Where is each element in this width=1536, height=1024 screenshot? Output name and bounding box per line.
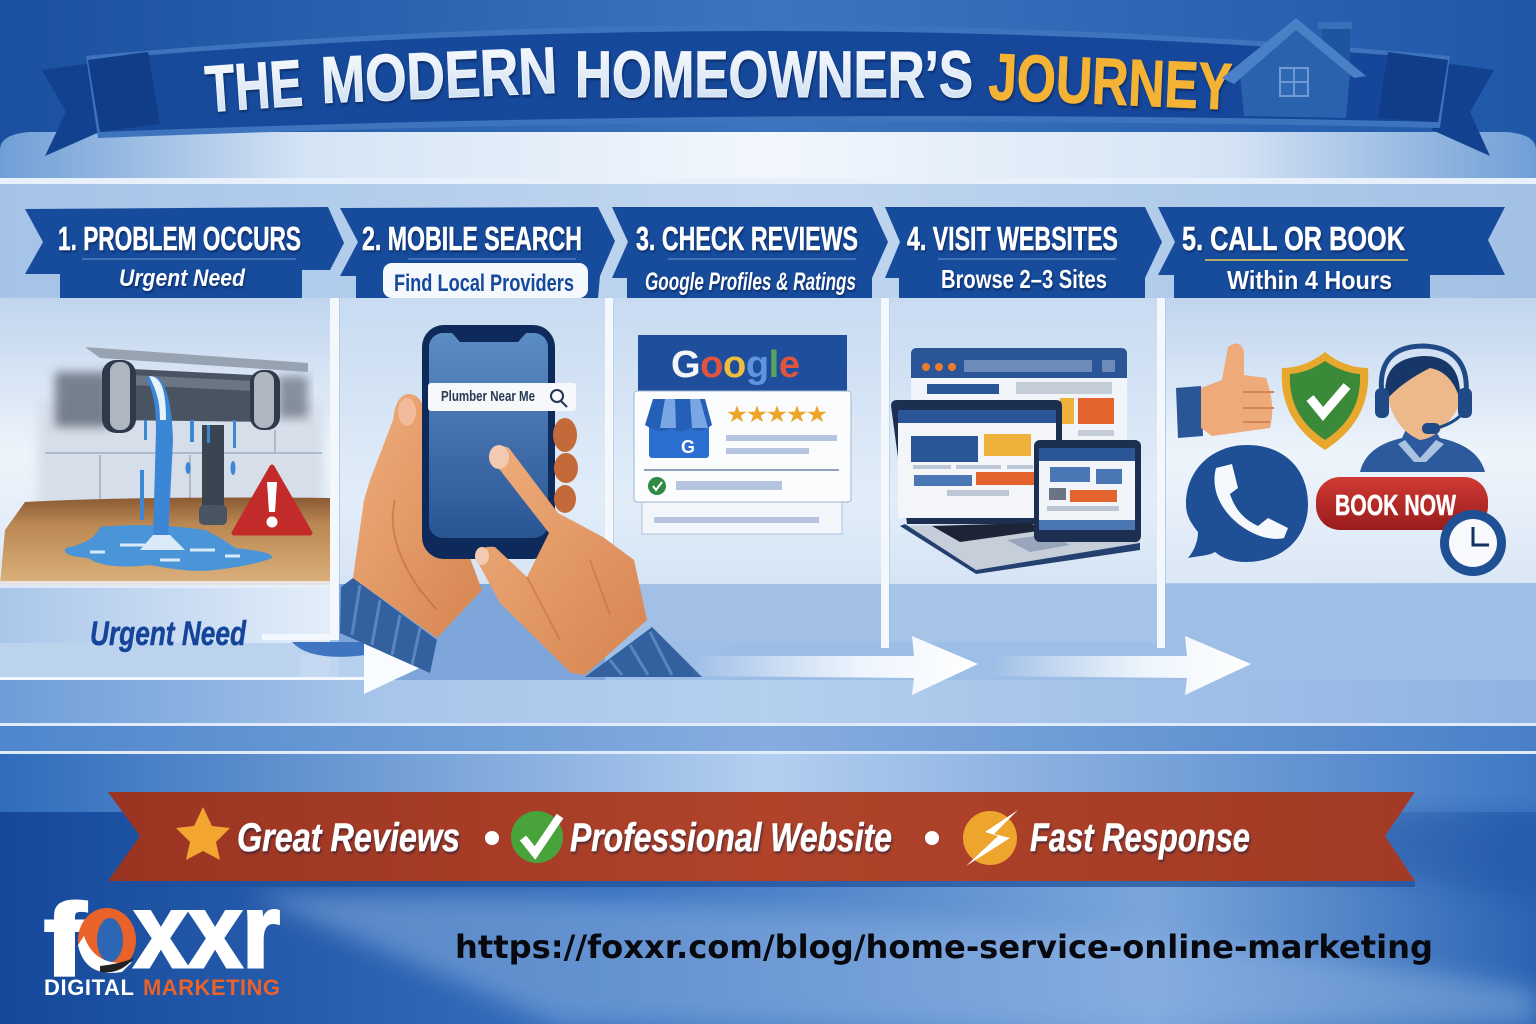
logo tagline: MARKETING [143, 975, 280, 1000]
logo tagline: DIGITAL [44, 975, 134, 1000]
step 4 header: 4. VISIT WEBSITES [907, 220, 1118, 257]
ribbon tails [42, 62, 1494, 156]
step 3 header [612, 207, 888, 298]
title text: HOMEOWNER’S [575, 37, 973, 111]
icon: house [1222, 18, 1366, 118]
icon: support agent [1360, 346, 1485, 472]
icon: lightning [963, 810, 1018, 866]
warning triangle [234, 467, 310, 533]
illustration: call or book icons [1176, 343, 1506, 576]
button: book now [1316, 477, 1488, 530]
right cuff [585, 627, 702, 677]
step 2 header: 2. MOBILE SEARCH [362, 220, 582, 257]
step 4 header [885, 207, 1162, 298]
step 4 header: Browse 2–3 Sites [941, 264, 1107, 294]
illustration: hands holding phone [340, 325, 702, 677]
fingers right side [553, 418, 578, 513]
button: find local providers [383, 263, 588, 298]
title text: THE [203, 45, 305, 126]
button: book now: BOOK NOW [1335, 490, 1456, 522]
arrow 3 [990, 636, 1251, 695]
panels: step columns [0, 298, 1536, 680]
icon: magnifier [551, 390, 567, 407]
wall [38, 372, 323, 510]
bottom ribbon [108, 792, 1415, 887]
google header: G [671, 344, 701, 386]
label: fast response: Fast Response [1030, 816, 1250, 860]
step 1 header [25, 207, 344, 298]
source url: https://foxxr.com/blog/home-service-online-marketing [455, 928, 1433, 966]
back browser [911, 348, 1127, 520]
label: professional website: Professional Website [570, 816, 892, 860]
title text: MODERN [319, 33, 558, 117]
arrow 1 [0, 634, 426, 694]
step 3 header: 3. CHECK REVIEWS [636, 220, 858, 257]
icon: store: G [681, 437, 695, 457]
illustration: websites on devices [891, 348, 1141, 574]
back card [642, 500, 842, 534]
pipe [85, 347, 308, 525]
water drips [140, 420, 236, 520]
icon: shield [1282, 352, 1368, 450]
white edge strip [0, 581, 330, 588]
logo wordmark: xxr [134, 873, 280, 990]
icon: green check [511, 811, 563, 863]
left hand [353, 394, 482, 638]
separator dot [485, 831, 499, 845]
logo: foxxr [44, 873, 280, 1000]
icon: check [648, 477, 666, 495]
step 1 header: Urgent Need [119, 265, 246, 292]
icon: clock [1440, 510, 1506, 576]
logo wordmark [44, 873, 280, 997]
step 1 header: 1. PROBLEM OCCURS [58, 220, 301, 257]
review card [634, 391, 851, 502]
google header: oogle [700, 344, 800, 386]
phone [422, 325, 555, 559]
icon: star [176, 807, 230, 860]
icon: thumbs up [1176, 343, 1274, 438]
rating stars: ★★★★★ [727, 404, 827, 426]
search bar [428, 383, 576, 411]
title text [203, 33, 1233, 126]
icon: store [645, 399, 712, 458]
title text: JOURNEY [987, 39, 1233, 124]
separator dot [925, 831, 939, 845]
urgent need label: Urgent Need [90, 615, 247, 653]
label: great reviews: Great Reviews [237, 816, 460, 860]
step 5 header: 5. CALL OR BOOK [1182, 220, 1405, 257]
arrow 2 [690, 636, 978, 695]
step 2 header [340, 207, 615, 298]
tablet [1034, 440, 1141, 542]
water stream [146, 376, 173, 540]
title ribbon [42, 18, 1494, 156]
search bar: Plumber Near Me [441, 388, 535, 405]
google header [638, 335, 847, 393]
logo wordmark: f [44, 883, 87, 997]
step 5 header [1158, 207, 1505, 298]
illustration: leaking pipe [0, 347, 330, 588]
button: find local providers: Find Local Providers [394, 270, 574, 297]
illustration: google reviews [634, 335, 851, 534]
left cuff [340, 578, 437, 673]
text lines [644, 435, 839, 490]
laptop [891, 400, 1140, 574]
step 3 header: Google Profiles & Ratings [645, 268, 856, 296]
floor [0, 498, 330, 585]
step 5 header: Within 4 Hours [1227, 265, 1392, 295]
icon: phone speech bubble [1186, 445, 1308, 562]
right hand [475, 446, 647, 675]
water puddle [65, 525, 272, 571]
